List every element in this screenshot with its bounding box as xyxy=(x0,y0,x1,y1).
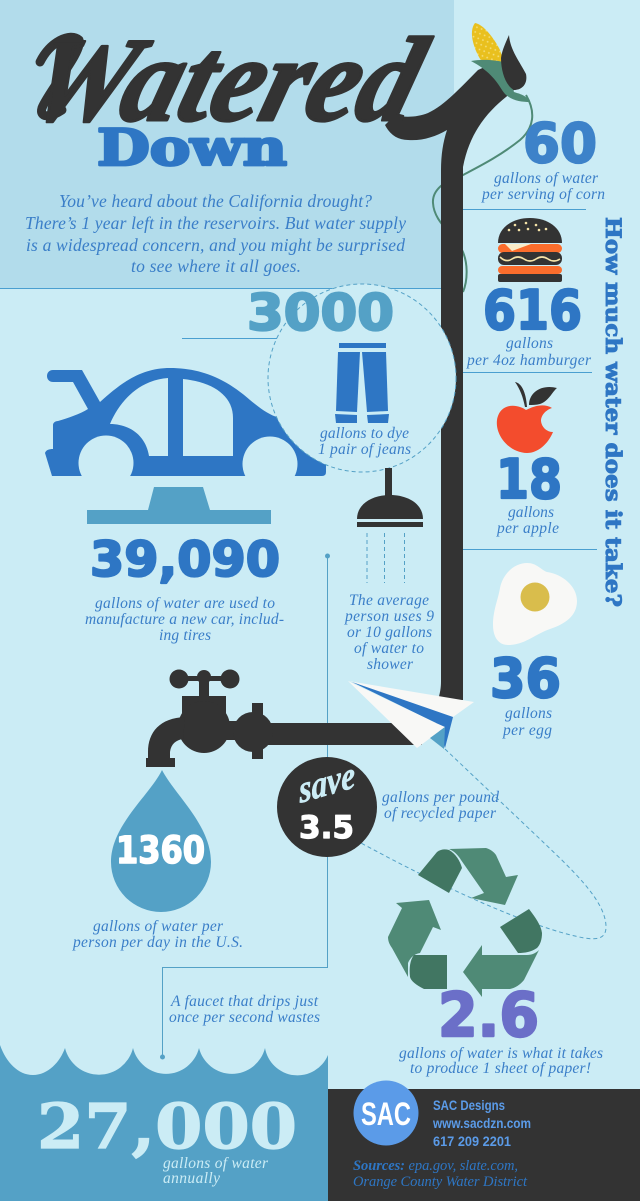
intro text: is a widespread concern, and you might be surprised xyxy=(26,235,405,255)
water panel xyxy=(0,1045,328,1201)
water panel caption xyxy=(163,1155,269,1187)
recycled paper caption: of recycled paper xyxy=(384,805,497,822)
dashed circle: jeans xyxy=(268,284,456,472)
shower caption: of water to xyxy=(354,640,424,657)
stat: corn 60 xyxy=(481,112,605,203)
logo: SAC xyxy=(354,1080,418,1146)
stat: apple 18: per apple xyxy=(496,520,559,537)
icon: jeans xyxy=(335,343,389,423)
icon: apple xyxy=(497,382,557,453)
faucet drip caption xyxy=(169,993,320,1026)
stat: corn 60: per serving of corn xyxy=(481,186,605,203)
contact details xyxy=(432,1097,531,1149)
contact details: 617 209 2201 xyxy=(433,1133,511,1149)
car caption: gallons of water are used to xyxy=(95,595,275,612)
intro text xyxy=(25,191,406,276)
stat: egg 36 xyxy=(490,647,561,739)
stat: apple 18: 18 xyxy=(496,448,562,511)
paper caption: to produce 1 sheet of paper! xyxy=(410,1060,591,1077)
icon: faucet and pipe xyxy=(146,670,422,767)
icon: shower xyxy=(357,468,423,583)
shower caption: person uses 9 xyxy=(344,608,434,625)
footer panel xyxy=(328,1080,640,1201)
connector line xyxy=(160,554,330,1060)
stat: hamburger 616: 616 xyxy=(483,279,582,342)
car caption xyxy=(85,595,284,644)
stat: corn 60: gallons of water xyxy=(494,170,599,187)
save circle: 3.5 xyxy=(299,810,354,846)
jeans caption: gallons to dye xyxy=(320,425,409,442)
water panel caption: annually xyxy=(163,1170,220,1187)
stat: hamburger 616: per 4oz hamburger xyxy=(466,352,592,369)
paper caption: gallons of water is what it takes xyxy=(399,1045,603,1062)
intro text: There’s 1 year left in the reservoirs. But water supply xyxy=(25,213,406,233)
car caption: ing tires xyxy=(159,627,211,644)
water drop xyxy=(111,770,211,912)
contact details: SAC Designs xyxy=(433,1097,505,1113)
side heading: How much water does it take? xyxy=(601,217,626,607)
stat: hamburger 616 xyxy=(466,279,592,369)
water panel caption: gallons of water xyxy=(163,1155,269,1172)
recycled paper caption: gallons per pound xyxy=(382,789,499,806)
shower caption: or 10 gallons xyxy=(347,624,432,641)
stat: jeans 3000: 3000 xyxy=(247,284,394,342)
intro text: to see where it all goes. xyxy=(131,256,301,276)
stat: apple 18 xyxy=(496,448,562,537)
water pipe xyxy=(385,60,514,700)
drop caption: person per day in the U.S. xyxy=(72,934,243,951)
faucet drip caption: once per second wastes xyxy=(169,1009,320,1026)
corn vine xyxy=(433,95,532,292)
recycled paper caption xyxy=(382,789,499,822)
icon: corn xyxy=(471,23,530,102)
drop caption: gallons of water per xyxy=(93,918,224,935)
jeans caption: 1 pair of jeans xyxy=(318,441,411,458)
title: Down: Down xyxy=(97,118,287,177)
contact details: www.sacdzn.com xyxy=(432,1115,531,1131)
icon: hamburger xyxy=(498,218,562,282)
stat: car 39,090: 39,090 xyxy=(90,532,280,588)
dashed flight path xyxy=(361,749,606,939)
intro text: You’ve heard about the California drought? xyxy=(59,191,372,211)
icon: fried egg xyxy=(493,563,577,645)
stat: 27,000: 27,000 xyxy=(37,1090,297,1163)
car caption: manufacture a new car, includ- xyxy=(85,611,284,628)
save circle: save xyxy=(297,754,356,812)
drop caption xyxy=(72,918,243,951)
paper caption xyxy=(399,1045,603,1077)
shower caption xyxy=(344,592,434,673)
stat: apple 18: gallons xyxy=(508,504,554,521)
sources: Orange County Water District xyxy=(353,1174,528,1190)
stat: hamburger 616: gallons xyxy=(506,335,553,352)
faucet drip caption: A faucet that drips just xyxy=(170,993,319,1010)
shower caption: The average xyxy=(349,592,429,609)
save circle xyxy=(277,754,377,857)
stat: 1360: 1360 xyxy=(116,829,205,872)
jeans caption xyxy=(318,425,411,458)
stat: paper 2.6: 2.6 xyxy=(438,980,539,1051)
shower caption: shower xyxy=(367,656,414,673)
stat: egg 36: 36 xyxy=(490,647,561,710)
stat: egg 36: gallons xyxy=(505,705,552,722)
icon: paper plane xyxy=(348,681,474,749)
sources xyxy=(353,1158,528,1190)
header panel xyxy=(0,0,454,288)
title: Watered: Watered xyxy=(14,14,440,146)
sources: Sources: epa.gov, slate.com, xyxy=(353,1158,518,1174)
stat: corn 60: 60 xyxy=(523,112,597,175)
icon: recycle xyxy=(388,848,542,997)
icon: car xyxy=(45,368,326,492)
stat: egg 36: per egg xyxy=(502,722,552,739)
logo: SAC: SAC xyxy=(361,1096,411,1132)
icon: pedestal xyxy=(87,487,271,524)
